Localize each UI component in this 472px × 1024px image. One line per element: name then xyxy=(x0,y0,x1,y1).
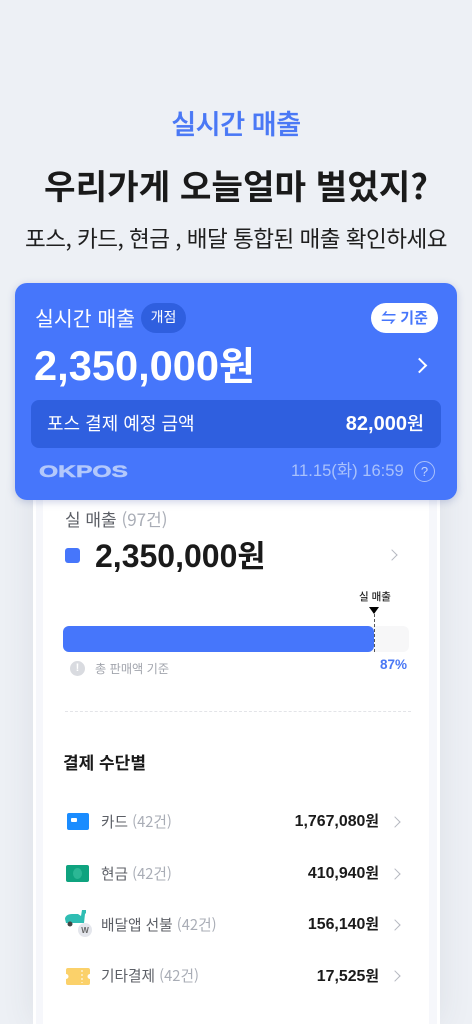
amount: 410,940원 xyxy=(308,862,379,883)
panel: real sales summary xyxy=(63,506,407,677)
icon: help xyxy=(414,461,435,482)
percent label: 87% xyxy=(380,657,407,672)
chevron xyxy=(389,868,401,880)
icon: cash xyxy=(66,865,89,882)
icon: scooter xyxy=(65,910,92,937)
card amount: 2,350,000원 xyxy=(34,336,255,392)
chevron xyxy=(386,549,398,561)
icon: help: ? xyxy=(421,464,428,479)
chevron xyxy=(389,919,401,931)
strip label: 포스 결제 예정 금액 xyxy=(47,410,195,436)
toggle: basis: ⇋ 기준 xyxy=(381,307,428,328)
real sales label: 실 매출 (97건) xyxy=(65,506,167,531)
icon: info: ! xyxy=(76,662,79,674)
row: cash xyxy=(66,862,400,884)
badge: store xyxy=(141,303,186,333)
amount: 17,525원 xyxy=(317,965,379,986)
label: 현금 (42건) xyxy=(101,863,172,884)
amount: 156,140원 xyxy=(308,913,379,934)
heading: by payment method: 결제 수단별 xyxy=(63,749,146,774)
label: 배달앱 선불 (42건) xyxy=(101,914,217,935)
strip amount: 82,000원 xyxy=(346,410,424,436)
amount: 1,767,080원 xyxy=(295,810,379,831)
panel: phone screen card xyxy=(33,470,440,1024)
marker label: 실 매출 xyxy=(359,589,391,604)
label: 카드 (42건) xyxy=(101,811,172,832)
chevron xyxy=(389,816,401,828)
row: other payment xyxy=(66,965,400,986)
headline block xyxy=(25,103,447,254)
POS payment strip xyxy=(31,400,441,448)
row: delivery app xyxy=(65,910,400,937)
label: 기타결제 (42건) xyxy=(101,965,199,986)
chevron xyxy=(412,358,427,373)
toggle: basis xyxy=(371,303,438,333)
divider xyxy=(65,711,411,712)
badge: store: 개점 xyxy=(151,307,176,327)
chevron xyxy=(389,970,401,982)
real sales amount: 2,350,000원 xyxy=(95,532,265,576)
marker dashed line xyxy=(374,614,375,652)
icon: ticket xyxy=(66,968,90,985)
icon: scooter: W xyxy=(81,926,89,935)
basis note: 총 판매액 기준 xyxy=(95,659,169,677)
progress bar xyxy=(63,626,409,652)
panel: blue realtime sales card xyxy=(15,283,457,500)
marker triangle xyxy=(369,607,379,614)
timestamp: 11.15(화) 16:59 xyxy=(291,461,404,480)
eyebrow heading: 실시간 매출 xyxy=(171,103,301,142)
icon: info xyxy=(70,661,85,676)
progress fill 87% xyxy=(63,626,374,652)
icon: blue legend square xyxy=(65,548,80,563)
row: card xyxy=(67,810,400,832)
main title: 우리가게 오늘얼마 벌었지? xyxy=(44,159,428,209)
icon: card xyxy=(67,813,89,830)
subtitle: 포스, 카드, 현금 , 배달 통합된 매출 확인하세요 xyxy=(25,221,447,254)
card title: 실시간 매출 xyxy=(35,302,135,332)
